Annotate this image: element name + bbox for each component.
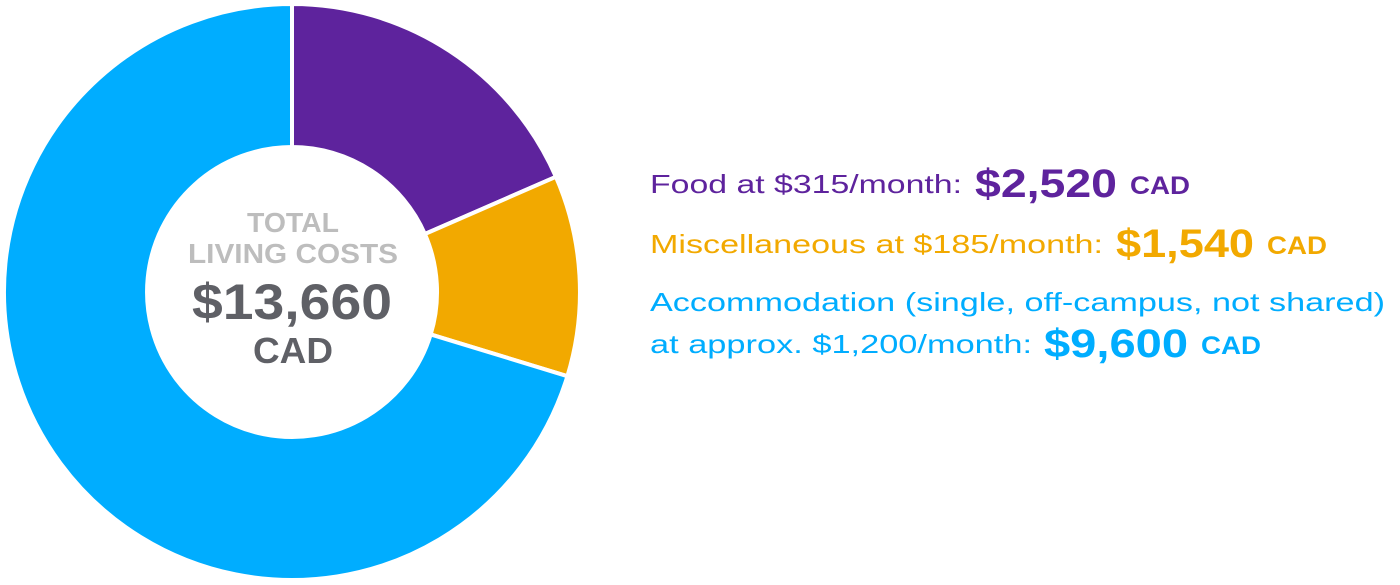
legend: miscellaneous: $1,540 (1116, 222, 1254, 266)
legend: food: CAD (1130, 172, 1190, 200)
legend: accommodation: Accommodation (single, off-campus, not shared) (650, 287, 1385, 317)
legend: accommodation: CAD (1201, 332, 1261, 360)
center label: CAD (253, 330, 333, 371)
center label: TOTAL (247, 207, 339, 238)
center label (188, 207, 398, 371)
segment: miscellaneous (425, 177, 580, 376)
legend: miscellaneous (650, 222, 1327, 266)
center label: LIVING COSTS (188, 238, 398, 269)
segment: accommodation (4, 4, 567, 580)
donut chart (4, 4, 580, 580)
legend: accommodation: $9,600 (1044, 322, 1188, 366)
segment: food (292, 4, 556, 234)
legend: accommodation: at approx. $1,200/month: (650, 329, 1032, 359)
legend: miscellaneous: Miscellaneous at $185/month: (650, 229, 1103, 259)
legend: food: Food at $315/month: (650, 169, 962, 199)
legend: accommodation (650, 287, 1385, 366)
legend: miscellaneous: CAD (1267, 232, 1327, 260)
center label: $13,660 (192, 274, 392, 330)
legend: food (650, 162, 1190, 206)
legend: food: $2,520 (975, 162, 1117, 206)
